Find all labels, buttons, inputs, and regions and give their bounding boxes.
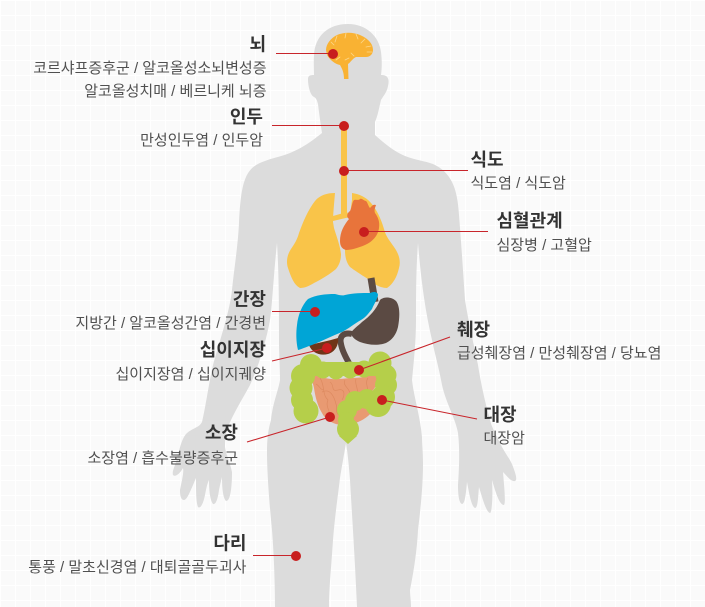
- stomach and duct: [341, 278, 399, 363]
- large intestine: [290, 352, 397, 444]
- label: pancreas: 췌장: [457, 320, 491, 340]
- left lung: [287, 193, 341, 288]
- label: legs: [28, 534, 247, 576]
- label: small intestine: 소장: [205, 423, 238, 443]
- body silhouette: [173, 24, 516, 607]
- label: brain: [33, 34, 266, 100]
- label: legs: 통풍 / 말초신경염 / 대퇴골골두괴사: [28, 559, 247, 576]
- label: small intestine: [87, 423, 238, 467]
- label: cardiovascular: [496, 211, 592, 254]
- label: large intestine: [484, 405, 525, 447]
- stomach: [351, 297, 399, 345]
- label: esophagus: 식도: [470, 150, 504, 170]
- label: pharynx: [140, 107, 263, 149]
- label: pancreas: [457, 320, 661, 362]
- label: large intestine: 대장: [484, 405, 517, 425]
- heart: [340, 199, 379, 250]
- label: brain: 알코올성치매 / 베르니케 뇌증: [84, 83, 266, 100]
- trachea and esophagus tube: [333, 126, 350, 221]
- lungs: [287, 193, 400, 288]
- label: brain: 뇌: [249, 34, 266, 54]
- leader lines: [247, 54, 488, 556]
- label: brain: 코르샤프증후군 / 알코올성소뇌변성증: [33, 60, 266, 77]
- label: pancreas: 급성췌장염 / 만성췌장염 / 당뇨염: [457, 345, 661, 362]
- label: liver: 지방간 / 알코올성간염 / 간경변: [75, 315, 266, 332]
- label: duodenum: [115, 340, 266, 383]
- esophagus to stomach: [371, 278, 375, 302]
- label: legs: 다리: [213, 534, 246, 554]
- label: esophagus: 식도염 / 식도암: [470, 175, 566, 192]
- label: liver: [75, 290, 266, 332]
- red markers: [291, 49, 387, 561]
- duodenum duct: [341, 333, 352, 363]
- duodenum dark tissue: [309, 338, 338, 355]
- liver: [296, 292, 378, 350]
- brain: [326, 33, 373, 79]
- label: small intestine: 소장염 / 흡수불량증후군: [87, 450, 238, 467]
- label: pharynx: 인두: [230, 107, 263, 127]
- label: cardiovascular: 심장병 / 고혈압: [496, 237, 592, 254]
- label: cardiovascular: 심혈관계: [496, 211, 563, 231]
- label: pharynx: 만성인두염 / 인두암: [140, 132, 263, 149]
- small intestine: [312, 373, 379, 425]
- label: esophagus: [470, 150, 566, 192]
- label: liver: 간장: [233, 290, 266, 310]
- label: duodenum: 십이지장: [200, 340, 266, 360]
- label: large intestine: 대장암: [484, 430, 525, 447]
- right lung: [345, 193, 400, 288]
- label: duodenum: 십이지장염 / 십이지궤양: [115, 366, 266, 383]
